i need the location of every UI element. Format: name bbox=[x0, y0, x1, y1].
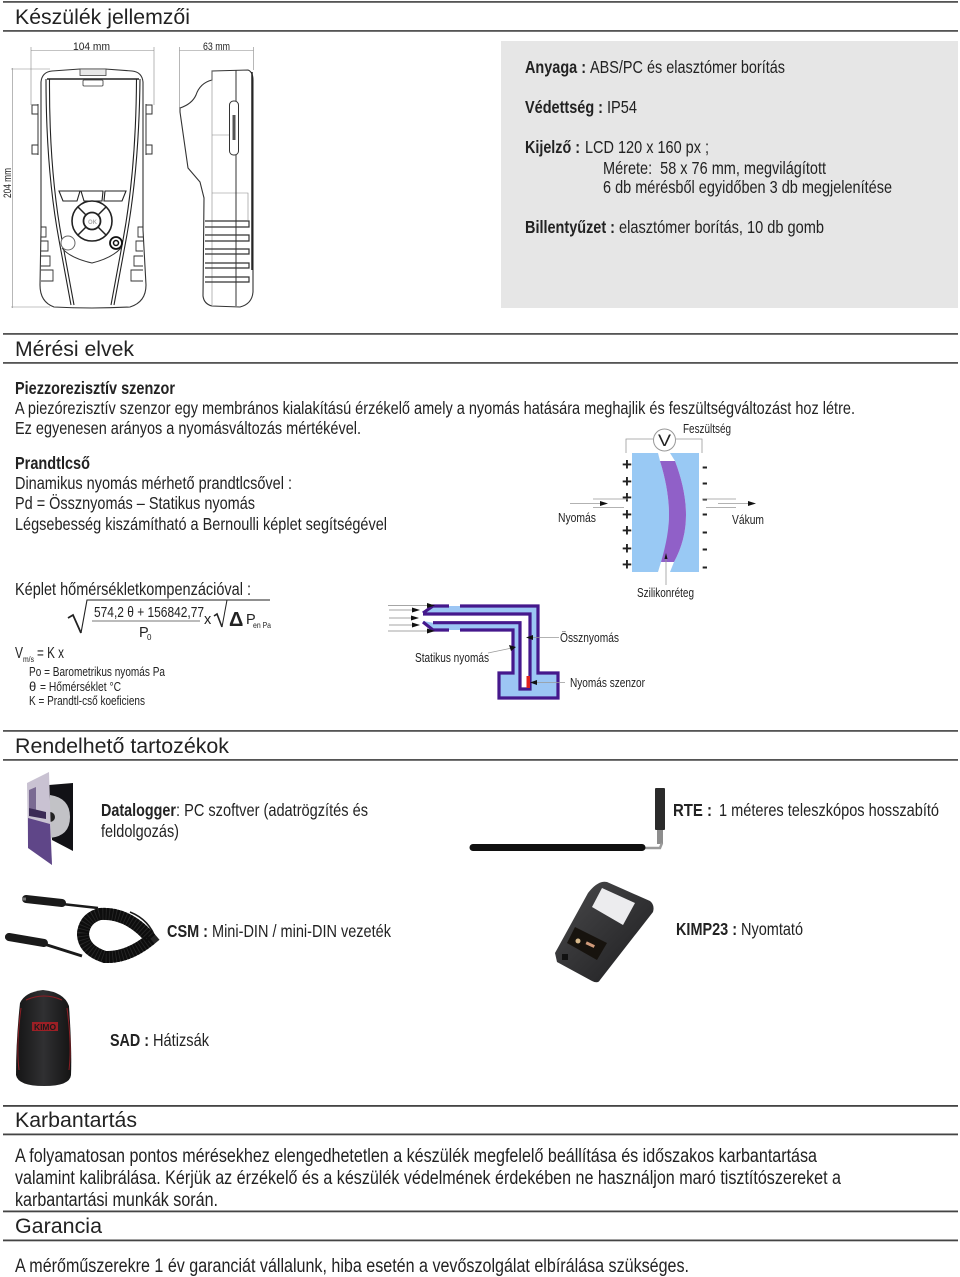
spec: display bbox=[525, 137, 892, 197]
arrow: pressure bbox=[558, 499, 628, 525]
accessory: CSM: Mini-DIN / mini-DIN vezeték bbox=[212, 921, 391, 941]
dimension: height 204 mm bbox=[2, 68, 50, 308]
minus signs: - bbox=[702, 489, 708, 508]
heading: Garancia: Garancia bbox=[15, 1215, 102, 1238]
formula: Po = Barometrikus nyomás Pa bbox=[29, 664, 166, 679]
device side view bbox=[180, 70, 253, 307]
diagram: Pitot tube bbox=[388, 603, 646, 698]
spec: keyboard bbox=[525, 217, 824, 237]
formula: 0 bbox=[147, 633, 152, 642]
flow arrows bbox=[388, 603, 435, 634]
silicon blocks bbox=[632, 453, 699, 572]
membrane bbox=[660, 461, 686, 562]
panel: device specifications bbox=[501, 41, 958, 308]
device front view: OK bbox=[88, 220, 98, 226]
icon: telescopic rod bbox=[473, 788, 665, 848]
minus signs: - bbox=[702, 504, 708, 523]
spec: protection: IP54 bbox=[607, 97, 637, 117]
spec: display: Kijelző : bbox=[525, 137, 580, 157]
device front view bbox=[32, 69, 152, 308]
label: silicon layer: Szilikonréteg bbox=[637, 585, 694, 600]
spec: keyboard: Billentyűzet : bbox=[525, 217, 615, 237]
accessory: RTE bbox=[473, 788, 939, 848]
heading: Karbantartás: Karbantartás bbox=[15, 1109, 137, 1132]
icon: printer bbox=[555, 882, 654, 982]
tube fill bbox=[423, 606, 558, 698]
spec: display: LCD 120 x 160 px ; bbox=[585, 137, 709, 157]
plus signs: + bbox=[622, 555, 632, 574]
text block: piezoresistive sensor bbox=[15, 378, 855, 438]
plus signs: + bbox=[622, 488, 632, 507]
diagram: device dimensions bbox=[2, 41, 254, 308]
formula: 574,2 θ + 156842,77 bbox=[94, 605, 204, 621]
minus signs: - bbox=[702, 557, 708, 576]
accessory: CSM: CSM : bbox=[167, 921, 208, 941]
spec: display: 6 db mérésből egyidőben 3 db megjelenítése bbox=[603, 177, 892, 197]
accessory: KIMP23: KIMP23 : bbox=[676, 919, 737, 939]
minus signs bbox=[702, 457, 708, 576]
text block: maintenance: A folyamatosan pontos mérésekhez elengedhetetlen a készülék megfelelő beállítása és időszakos karbantartása bbox=[15, 1146, 817, 1167]
plus signs: + bbox=[622, 521, 632, 540]
label: total pressure bbox=[526, 630, 619, 645]
formula: V bbox=[15, 645, 23, 662]
heading: Készülék jellemzői: Készülék jellemzői bbox=[15, 6, 190, 29]
minus signs: - bbox=[702, 473, 708, 492]
accessory: Datalogger: feldolgozás) bbox=[101, 821, 179, 841]
dimension: depth 63 mm: 63 mm bbox=[203, 41, 230, 53]
text block: warranty: A mérőműszerekre 1 év garanciát vállalunk, hiba esetén a vevőszolgálat elbírálása szükséges. bbox=[15, 1256, 689, 1277]
formula bbox=[15, 579, 271, 708]
text block: Pitot tube: Dinamikus nyomás mérhető prandtlcsővel : bbox=[15, 473, 292, 493]
spec: material bbox=[525, 57, 785, 77]
arrow: pressure: Nyomás bbox=[558, 510, 596, 525]
spec: material: Anyaga : bbox=[525, 57, 586, 77]
central channel bbox=[423, 614, 530, 689]
icon: backpack bbox=[16, 990, 71, 1086]
accessory: SAD bbox=[16, 990, 209, 1086]
formula: m/s bbox=[23, 654, 34, 664]
accessory: Datalogger bbox=[27, 772, 368, 865]
formula: P bbox=[246, 612, 256, 628]
text block: piezoresistive sensor: Ez egyenesen arányos a nyomásváltozás mértékével. bbox=[15, 418, 361, 438]
spec: material: ABS/PC és elasztómer borítás bbox=[590, 57, 785, 77]
minus signs: - bbox=[702, 522, 708, 541]
accessory: Datalogger: Datalogger bbox=[101, 800, 176, 820]
text block: Pitot tube bbox=[15, 453, 387, 534]
text block: maintenance: karbantartási munkák során. bbox=[15, 1190, 218, 1211]
diagram: piezoresistive sensor bbox=[558, 421, 764, 600]
dimension: depth 63 mm bbox=[180, 41, 254, 108]
icon: software box bbox=[27, 772, 73, 865]
spec: protection: Védettség : bbox=[525, 97, 603, 117]
formula: = Hőmérséklet °C bbox=[40, 679, 121, 694]
dimension: width 104 mm: 104 mm bbox=[73, 41, 110, 53]
label: silicon layer bbox=[637, 553, 694, 600]
heading: Mérési elvek: Mérési elvek bbox=[15, 338, 134, 361]
voltage meter: V bbox=[658, 431, 672, 450]
formula: K = Prandtl-cső koeficiens bbox=[29, 693, 145, 708]
text block: Pitot tube: Prandtlcső bbox=[15, 453, 90, 473]
plus signs: + bbox=[622, 455, 632, 474]
label: total pressure: Össznyomás bbox=[560, 630, 619, 645]
icon: backpack: KIMO bbox=[34, 1023, 56, 1032]
label: pressure sensor: Nyomás szenzor bbox=[570, 675, 646, 690]
accessory: RTE: RTE : bbox=[673, 800, 712, 820]
formula: Δ bbox=[229, 609, 243, 631]
voltage meter: Feszültség bbox=[683, 421, 731, 436]
text block: Pitot tube: Légsebesség kiszámítható a Bernoulli képlet segítségével bbox=[15, 514, 387, 534]
plus signs: + bbox=[622, 505, 632, 524]
dimension: height 204 mm: 204 mm bbox=[2, 168, 14, 198]
formula: Képlet hőmérsékletkompenzációval : bbox=[15, 579, 251, 599]
formula: = K x bbox=[37, 645, 64, 662]
plus signs: + bbox=[622, 472, 632, 491]
text block: piezoresistive sensor: Piezzorezisztív szenzor bbox=[15, 378, 175, 398]
label: static pressure: Statikus nyomás bbox=[415, 650, 489, 665]
dimension: width 104 mm bbox=[31, 41, 154, 105]
plus signs bbox=[622, 455, 632, 574]
text block: maintenance bbox=[15, 1146, 841, 1211]
accessory: CSM bbox=[5, 899, 391, 957]
accessory: SAD: SAD : bbox=[110, 1030, 149, 1050]
accessory: Datalogger: : PC szoftver (adatrögzítés és bbox=[176, 800, 368, 820]
formula: θ bbox=[29, 679, 36, 694]
accessory: SAD: Hátizsák bbox=[153, 1030, 209, 1050]
heading: Rendelhető tartozékok: Rendelhető tartozékok bbox=[15, 735, 230, 758]
plus signs: + bbox=[622, 539, 632, 558]
formula: P bbox=[139, 625, 149, 641]
arrow: vacuum bbox=[703, 499, 764, 527]
voltage meter bbox=[626, 421, 731, 453]
accessory: KIMP23 bbox=[555, 882, 803, 982]
formula: en Pa bbox=[253, 620, 271, 630]
spec: keyboard: elasztómer borítás, 10 db gomb bbox=[619, 217, 824, 237]
icon: coiled cable bbox=[5, 899, 156, 957]
minus signs: - bbox=[702, 539, 708, 558]
formula: x bbox=[204, 612, 212, 628]
spec: display: Mérete: 58 x 76 mm, megvilágított bbox=[603, 158, 826, 178]
label: pressure sensor bbox=[530, 675, 646, 690]
minus signs: - bbox=[702, 457, 708, 476]
text block: Pitot tube: Pd = Össznyomás – Statikus nyomás bbox=[15, 493, 255, 513]
arrow: vacuum: Vákum bbox=[732, 512, 764, 527]
tube walls bbox=[423, 606, 558, 698]
sensor bbox=[526, 676, 530, 688]
accessory: KIMP23: Nyomtató bbox=[741, 919, 803, 939]
